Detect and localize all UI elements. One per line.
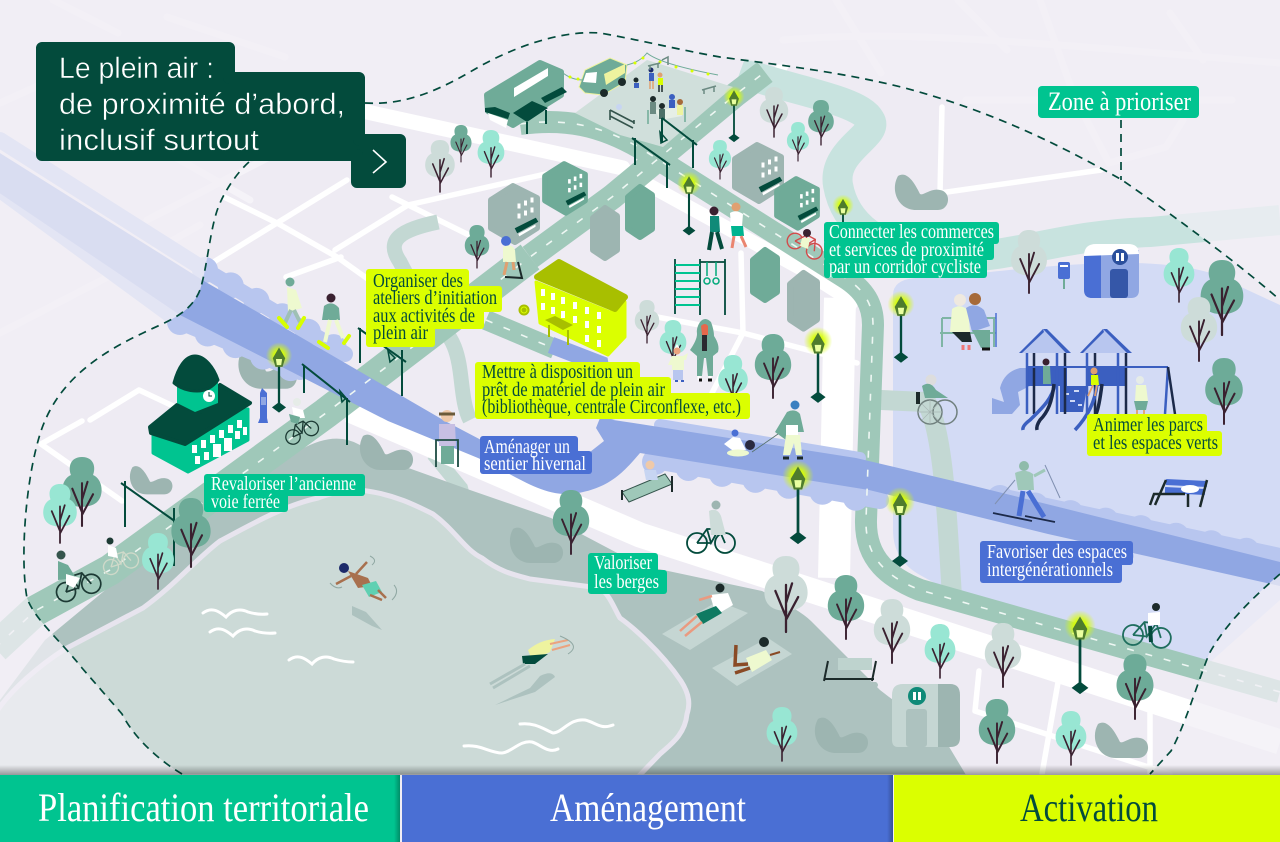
left cyclist two (101, 538, 140, 576)
couple walking (709, 202, 746, 250)
label: zone à prioriser: Zone à prioriser (1048, 87, 1191, 116)
category: activation (894, 775, 1280, 842)
label: connecter: par un corridor cycliste (829, 256, 981, 278)
scooter rider (501, 236, 522, 278)
label: favoriser (980, 541, 1133, 583)
clock building (150, 356, 250, 472)
snowshoer two (319, 294, 349, 348)
shore sunbathers (662, 584, 792, 686)
slides (1023, 384, 1055, 430)
swing frame (1165, 367, 1168, 414)
posts (1027, 353, 1126, 414)
label: revaloriser: voie ferrée (211, 491, 280, 513)
park cyclist (1122, 603, 1172, 649)
label: mettre à disposition: (bibliothèque, centrale Circonflexe, etc.) (482, 396, 741, 418)
category: aménagement: Aménagement (550, 785, 746, 830)
wheelchair user (916, 374, 957, 424)
players (634, 68, 663, 92)
label: connecter: Connecter les commerces (829, 221, 994, 243)
corridor cyclist near the clock building (282, 398, 321, 447)
label: animer (1087, 414, 1222, 456)
river (0, 150, 1280, 586)
person with walking frame (436, 410, 458, 467)
creek behind the yellow building (551, 345, 610, 420)
label: organiser: Organiser des (373, 270, 463, 292)
person on swing (1134, 376, 1148, 414)
sunbather one (680, 584, 733, 636)
outer streets (0, 0, 1280, 333)
label: animer: Animer les parcs (1093, 414, 1203, 436)
bench with person (610, 104, 634, 128)
string lights (563, 53, 718, 80)
left cyclist one (53, 550, 103, 604)
bike-share post (258, 388, 268, 423)
title text: Le plein air : (59, 52, 214, 85)
canal (740, 72, 1280, 257)
person on bench by the river (622, 460, 672, 502)
trees (43, 87, 1243, 765)
label: animer: et les espaces verts (1093, 432, 1218, 454)
playground (992, 329, 1175, 430)
title text: de proximité d’abord, (59, 88, 345, 121)
label: favoriser: intergénérationnels (987, 559, 1113, 581)
child on slide (1088, 368, 1099, 396)
buildings (491, 145, 819, 328)
yellow building (518, 262, 625, 355)
picnic table group (648, 94, 685, 124)
chevron arrow (373, 150, 386, 173)
snowshoer one (279, 278, 304, 328)
label: organiser (366, 269, 502, 347)
elderly couple on bench (940, 293, 996, 350)
swimmer front crawl (490, 636, 573, 705)
white promenade (350, 410, 1280, 742)
light paths (394, 222, 952, 596)
people (53, 202, 1207, 649)
label: mettre à disposition (475, 361, 750, 419)
category: activation: Activation (1020, 785, 1158, 830)
restroom building, shore (892, 684, 960, 747)
climbing wall (1060, 386, 1087, 412)
category: aménagement (402, 775, 893, 842)
label: organiser: aux activités de (373, 305, 475, 327)
label: valoriser: Valoriser (594, 552, 652, 574)
label: organiser: ateliers d’initiation (373, 287, 497, 309)
label: favoriser: Favoriser des espaces (987, 541, 1127, 563)
tube slide (992, 368, 1032, 414)
lake waves (203, 610, 613, 753)
corridor cyclist (784, 228, 826, 262)
plaza (575, 60, 733, 147)
lake shore bushes (130, 175, 1148, 758)
label: aménager (480, 436, 592, 475)
parent and child (668, 319, 718, 381)
park area (893, 263, 1280, 665)
lake (0, 490, 689, 780)
street lamps (266, 86, 1096, 694)
title bubble (42, 48, 400, 182)
skier (993, 461, 1060, 522)
park bench with snow (1150, 480, 1207, 507)
sunbather two (735, 637, 780, 673)
food hall and plaza (485, 53, 718, 134)
child on deck (1042, 358, 1051, 384)
label: organiser: plein air (373, 322, 428, 344)
label: aménager: sentier hivernal (484, 453, 586, 475)
label: connecter (824, 221, 999, 278)
river snow (0, 140, 1280, 558)
label: connecter: et services de proximité (829, 239, 984, 261)
shore bench (816, 658, 878, 688)
deck panels (1028, 368, 1125, 386)
label: valoriser (588, 552, 667, 594)
cyclist by the shore (687, 500, 735, 553)
category: planification territoriale: Planification territoriale (38, 785, 369, 830)
label: mettre à disposition: prêt de matériel de plein air (482, 379, 665, 401)
roofs (1019, 329, 1070, 353)
streets (41, 67, 1170, 774)
fitness structure (675, 259, 725, 315)
label: valoriser: les berges (594, 571, 659, 593)
swimmer on back (330, 556, 397, 630)
catenary poles (121, 118, 697, 566)
walker with sled (724, 400, 804, 458)
label: revaloriser (204, 473, 365, 513)
small park benches (648, 57, 716, 94)
food building (485, 63, 567, 134)
corridor dashes (0, 72, 1280, 692)
label: aménager: Aménager un (484, 436, 570, 458)
category: planification territoriale (0, 775, 400, 842)
title text (59, 52, 345, 157)
label: mettre à disposition: Mettre à disposition un (482, 361, 633, 383)
green corridors (0, 72, 1280, 692)
restroom building, park (1058, 244, 1139, 298)
bar shadow (0, 765, 1280, 775)
food truck (579, 58, 627, 97)
label: revaloriser: Revaloriser l’ancienne (211, 473, 356, 495)
shore (0, 439, 966, 775)
title text: inclusif surtout (59, 124, 260, 157)
